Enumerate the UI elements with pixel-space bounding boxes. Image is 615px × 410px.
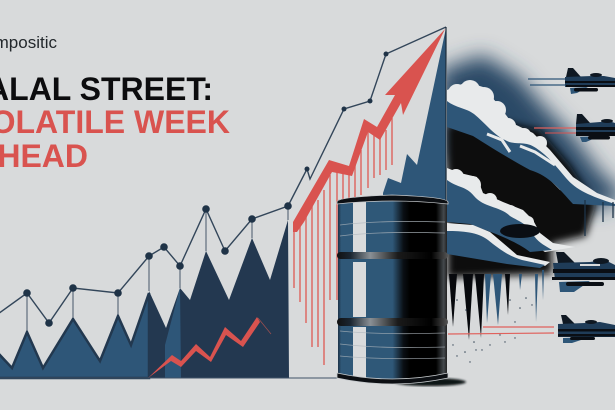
middle cloud dark shadow [500, 224, 540, 238]
jet: third one [552, 252, 615, 292]
oil barrel [337, 195, 466, 386]
jet body [565, 68, 615, 94]
chart: mountain area and trend line [0, 27, 446, 378]
barrel upper hoop [337, 252, 448, 259]
data points [23, 52, 388, 327]
jet: fourth one [448, 315, 615, 343]
jet body [561, 315, 575, 324]
chart baseline [0, 377, 340, 379]
middle cloud white mass [447, 168, 575, 252]
jet trails [528, 78, 566, 80]
tall peak edge [445, 27, 447, 205]
jet trails [483, 326, 554, 328]
barrel lower hoop [337, 318, 448, 326]
jet: upper one [528, 68, 615, 94]
title [0, 71, 230, 174]
dark area series [149, 220, 289, 378]
base cloud white mass [447, 223, 550, 266]
barrel highlight strip [353, 202, 366, 378]
barrel ridges [340, 221, 445, 359]
barrel body [338, 196, 447, 383]
upper cloud inner highlight [487, 134, 555, 165]
small red trend arrow [148, 317, 260, 378]
thin upper drips [585, 200, 613, 236]
trend line [0, 27, 446, 323]
jet: second one [534, 114, 615, 142]
speckled debris [452, 297, 533, 363]
barrel bottom rim [337, 373, 448, 384]
jet trails [534, 127, 576, 129]
barrel shadow [394, 378, 466, 386]
dark smoke core [447, 122, 596, 278]
big red arrow [293, 29, 445, 232]
tall blue peak [383, 28, 446, 205]
upper cloud blue body [447, 101, 615, 206]
middle cloud blue body [447, 180, 552, 252]
dark vertical drips [449, 274, 510, 340]
smoke and clouds [440, 55, 615, 363]
grey smoke haze [440, 55, 615, 210]
base cloud blue body [447, 231, 545, 268]
blue area series [0, 293, 149, 378]
upper cloud white mass [447, 80, 615, 206]
blue overlay peak [165, 288, 181, 378]
blue vertical drips [485, 270, 544, 325]
jet body [576, 114, 615, 142]
drop lines [27, 206, 288, 331]
barrel top rim [337, 195, 448, 204]
big red arrow drips [294, 118, 392, 365]
